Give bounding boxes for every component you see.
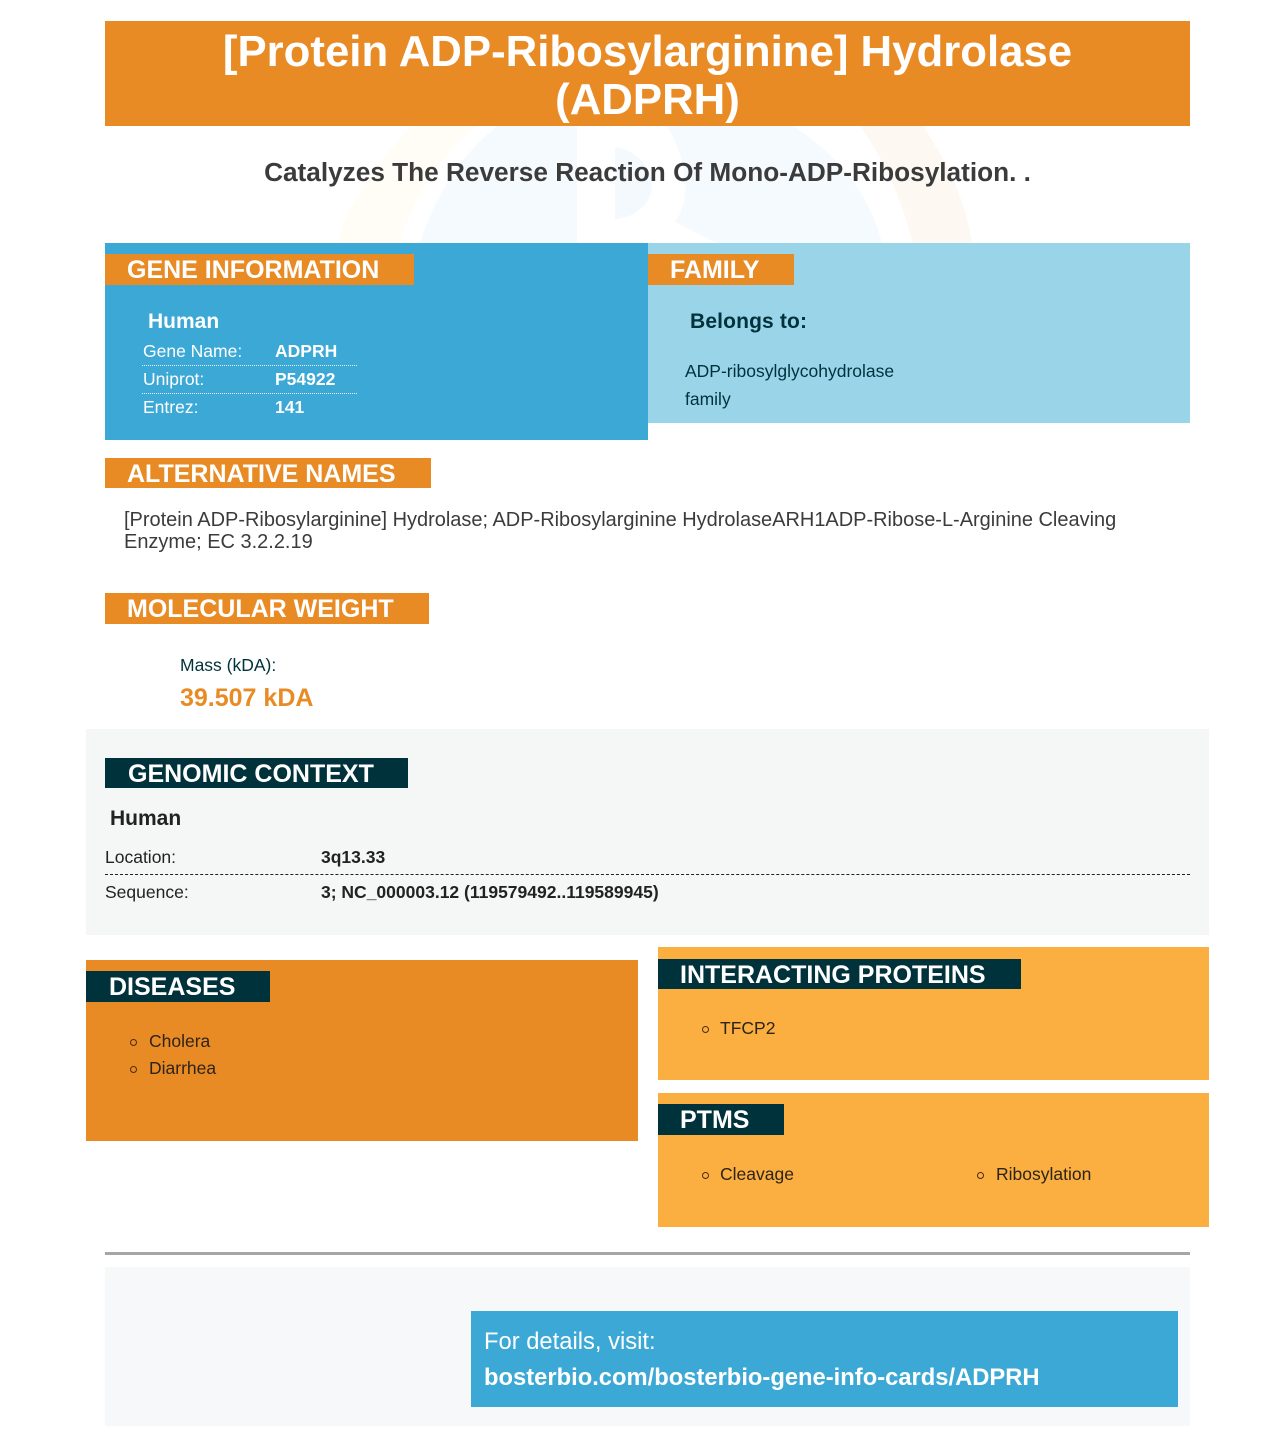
- heading: molecular weight: MOLECULAR WEIGHT: [127, 595, 394, 623]
- heading: genomic context: GENOMIC CONTEXT: [128, 760, 374, 788]
- watermark logo: [338, 126, 972, 243]
- title banner: [Protein ADP-Ribosylarginine] Hydrolase: [223, 27, 1072, 76]
- url: bosterbio.com/bosterbio-gene-info-cards/ADPRH: [484, 1364, 1040, 1391]
- location row: [105, 845, 1190, 875]
- alternative names text: [Protein ADP-Ribosylarginine] Hydrolase; ADP-Ribosylarginine HydrolaseARH1ADP-Ribose-L-Arginine Cleaving: [124, 509, 1116, 531]
- heading: gene information: GENE INFORMATION: [127, 256, 379, 284]
- panel: diseases: [86, 960, 638, 1141]
- panel: family: [648, 243, 1190, 423]
- disease item: Cholera: [149, 1031, 210, 1051]
- heading: interacting proteins: INTERACTING PROTEINS: [680, 961, 986, 989]
- heading: ptms: PTMS: [680, 1106, 749, 1134]
- heading: ptms: [658, 1104, 784, 1135]
- subtitle: Catalyzes The Reverse Reaction Of Mono-ADP-Ribosylation. .: [264, 157, 1031, 187]
- uniprot row: P54922: [275, 369, 335, 389]
- panel: footer: [105, 1267, 1190, 1426]
- entrez row: Entrez:: [143, 397, 198, 417]
- title banner: [105, 21, 1190, 126]
- panel: interacting proteins: [658, 947, 1209, 1080]
- ptm item: Cleavage: [720, 1164, 794, 1184]
- disease item: Diarrhea: [149, 1058, 216, 1078]
- panel: ptms: [658, 1093, 1209, 1227]
- entrez row: [143, 397, 304, 417]
- location row: Location:: [105, 847, 176, 867]
- gene name row: Gene Name:: [143, 341, 242, 361]
- entrez row: 141: [275, 397, 304, 417]
- family name: [685, 361, 894, 409]
- sequence row: 3; NC_000003.12 (119579492..119589945): [321, 882, 659, 902]
- family name: family: [685, 389, 731, 409]
- uniprot row: [142, 369, 357, 394]
- heading: family: [648, 254, 794, 285]
- mass label: Mass (kDA):: [180, 655, 276, 675]
- callout: details link: [471, 1311, 1178, 1407]
- heading: diseases: [86, 971, 270, 1002]
- heading: diseases: DISEASES: [109, 973, 235, 1001]
- alternative names text: [124, 509, 1116, 553]
- location row: 3q13.33: [321, 847, 385, 867]
- heading: alternative names: ALTERNATIVE NAMES: [127, 460, 396, 488]
- species label: Human: [148, 310, 219, 333]
- visit label: For details, visit:: [484, 1328, 656, 1355]
- footer rule: [105, 1252, 1190, 1255]
- sequence row: Sequence:: [105, 882, 189, 902]
- gene name row: [142, 341, 357, 366]
- title banner: (ADPRH): [555, 75, 740, 124]
- mass value: 39.507 kDA: [180, 684, 313, 712]
- belongs to label: Belongs to:: [690, 310, 807, 333]
- alternative names text: Enzyme; EC 3.2.2.19: [124, 531, 313, 553]
- panel: gene information: [105, 243, 648, 440]
- ptm item: Ribosylation: [996, 1164, 1091, 1184]
- sequence row: [105, 882, 659, 902]
- family name: ADP-ribosylglycohydrolase: [685, 361, 894, 381]
- uniprot row: Uniprot:: [143, 369, 204, 389]
- species label: Human: [110, 807, 181, 830]
- protein item: TFCP2: [720, 1018, 775, 1038]
- gene name row: ADPRH: [275, 341, 337, 361]
- panel: genomic context: [86, 729, 1209, 935]
- heading: family: FAMILY: [670, 256, 759, 284]
